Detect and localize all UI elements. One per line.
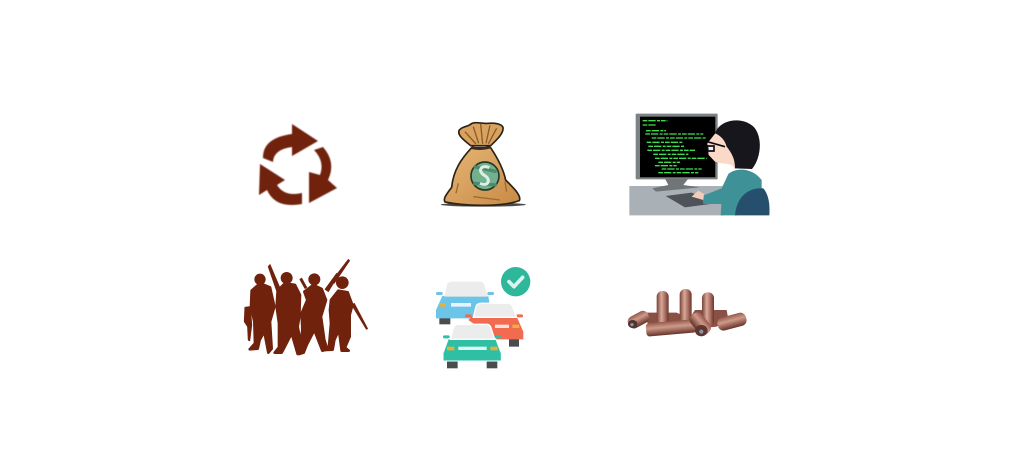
upright bullets	[657, 291, 669, 325]
lying bullet center	[646, 319, 697, 337]
icon: cars with check badge	[436, 267, 530, 368]
icon: bullets	[626, 289, 748, 337]
lying bullet right	[716, 311, 748, 332]
keyboard	[666, 193, 715, 207]
glasses	[707, 142, 725, 151]
green code lines	[643, 121, 707, 173]
icon: recycle arrows	[259, 124, 337, 205]
red car	[465, 303, 523, 347]
icon: money bag	[441, 123, 526, 207]
soldier 1	[244, 275, 274, 353]
soldier 3	[299, 275, 327, 354]
torso	[702, 170, 762, 215]
blue car	[436, 282, 494, 324]
desk	[629, 186, 723, 215]
hair	[715, 120, 760, 169]
check badge	[501, 267, 530, 296]
lying bullet left	[626, 309, 651, 330]
monitor	[636, 114, 718, 179]
monitor stand	[652, 179, 700, 192]
chair	[735, 188, 770, 215]
cluster backing	[645, 310, 728, 333]
soldier 2	[268, 265, 302, 354]
hand	[692, 191, 704, 200]
green car	[443, 324, 501, 368]
icon: soldiers silhouette	[244, 259, 368, 354]
lying bullet front	[687, 310, 713, 337]
icon: person at computer	[629, 114, 770, 215]
soldier 4	[324, 259, 368, 351]
face	[707, 132, 740, 169]
